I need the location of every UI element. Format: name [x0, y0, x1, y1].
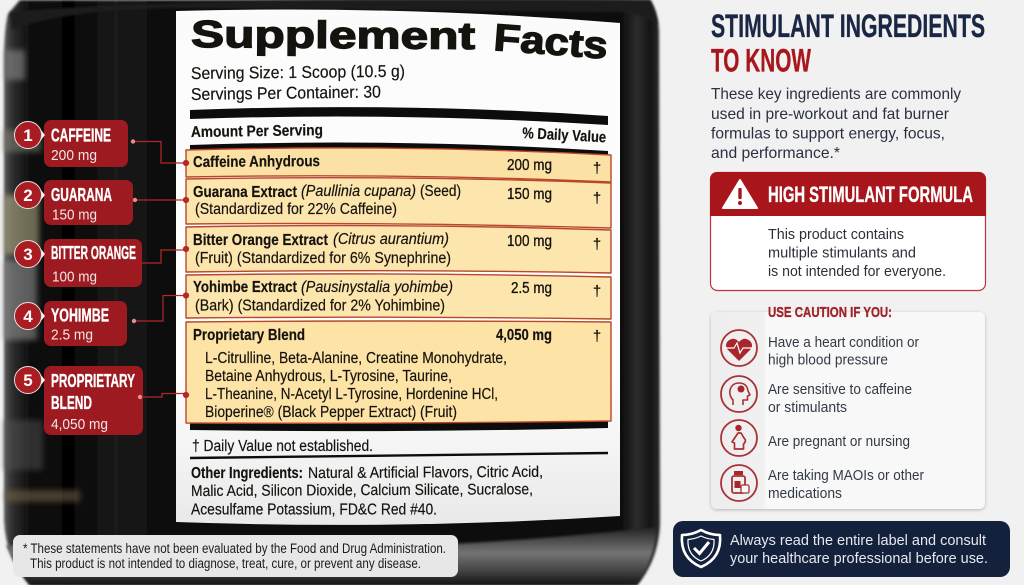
row: guarana extract: Guarana Extract	[193, 184, 297, 201]
caution: medications: Are taking MAOIs or other	[768, 467, 924, 484]
row: proprietary blend: Proprietary Blend	[193, 327, 305, 344]
callout 4: yohimbe: 2.5 mg	[51, 326, 93, 344]
callout 1: caffeine: 200 mg	[51, 147, 97, 164]
intro paragraph: formulas to support energy, focus,	[711, 126, 945, 142]
title: supplement facts	[191, 14, 609, 68]
table header: Amount Per Serving	[191, 122, 323, 141]
callout 3: bitter orange: BITTER ORANGE	[51, 243, 136, 263]
caution: medications: medications	[768, 485, 842, 502]
heading: stimulant ingredients to know	[711, 8, 985, 78]
row: yohimbe extract: 2.5 mg	[511, 280, 552, 297]
other ingredients: Acesulfame Potassium, FD&C Red #40.	[191, 502, 437, 518]
caution: caffeine sensitivity	[721, 376, 912, 416]
row: yohimbe extract: †	[593, 283, 601, 300]
row: proprietary blend: 4,050 mg	[496, 327, 552, 344]
callout 3: bitter orange	[14, 239, 142, 287]
row: caffeine anhydrous: Caffeine Anhydrous	[193, 153, 320, 171]
panel: use caution if you: USE CAUTION IF YOU:	[768, 304, 892, 321]
row: yohimbe extract: Yohimbe Extract	[193, 279, 297, 296]
warning body text: multiple stimulants and	[768, 244, 916, 262]
intro paragraph: used in pre-workout and fat burner	[711, 106, 950, 123]
row: bitter orange extract: (Fruit) (Standardized for 6% Synephrine)	[195, 250, 451, 267]
callout 2: guarana: GUARANA	[51, 185, 112, 205]
row: bitter orange extract: Bitter Orange Extract	[193, 232, 328, 249]
callout 5: proprietary blend: 4,050 mg	[51, 416, 108, 433]
supplement jar	[3, 0, 660, 585]
serving information: Servings Per Container: 30	[191, 82, 381, 104]
callout 2: guarana	[14, 180, 137, 225]
callout 1: caffeine	[14, 120, 135, 167]
callout 3: bitter orange: 3	[23, 245, 33, 264]
callout 4: yohimbe	[14, 301, 136, 346]
row: guarana extract: 150 mg	[507, 186, 552, 203]
row: bitter orange extract: †	[593, 236, 601, 253]
banner: consult your healthcare professional: your healthcare professional before use.	[730, 550, 988, 567]
row: yohimbe extract	[186, 274, 611, 319]
other ingredients	[191, 464, 543, 518]
caution: heart condition: Have a heart condition or	[768, 334, 919, 351]
banner: consult your healthcare professional: Always read the entire label and consult	[730, 532, 987, 549]
panel: high stimulant formula warning	[710, 172, 986, 290]
row: caffeine anhydrous: 200 mg	[507, 157, 552, 174]
row: guarana extract: (Paullinia cupana)	[301, 183, 416, 200]
row: yohimbe extract: (Pausinystalia yohimbe)	[301, 279, 453, 296]
heading: stimulant ingredients to know: TO KNOW	[711, 42, 812, 78]
row: caffeine anhydrous: †	[593, 160, 601, 177]
row: yohimbe extract: (Bark) (Standardized for 2% Yohimbine)	[195, 298, 445, 314]
disclaimer: * These statements have not been evaluated by the Food and Drug Administration.	[23, 541, 446, 556]
warning body text: This product contains	[768, 226, 904, 243]
callout 2: guarana: 150 mg	[52, 206, 97, 224]
caution: pregnant or nursing	[721, 420, 910, 456]
caution: medications	[721, 465, 924, 502]
panel: supplement facts label	[176, 10, 620, 525]
callout 5: proprietary blend: PROPRIETARY	[51, 371, 135, 391]
banner: consult your healthcare professional	[673, 521, 1010, 577]
table header	[191, 122, 607, 146]
other ingredients: Other Ingredients:	[191, 465, 303, 482]
caution: heart condition: high blood pressure	[768, 352, 888, 368]
callout 5: proprietary blend: BLEND	[51, 393, 92, 413]
caution: pregnant or nursing: Are pregnant or nursing	[768, 433, 910, 450]
callout 4: yohimbe: YOHIMBE	[51, 306, 109, 326]
title: supplement facts: Supplement	[191, 14, 476, 58]
serving information: Serving Size: 1 Scoop (10.5 g)	[191, 62, 405, 83]
row: proprietary blend: L-Theanine, N-Acetyl L-Tyrosine, Hordenine HCl,	[205, 386, 498, 403]
row: bitter orange extract	[186, 226, 611, 273]
row: proprietary blend: Betaine Anhydrous, L-Tyrosine, Taurine,	[205, 368, 452, 385]
row: proprietary blend	[186, 321, 611, 423]
callout 4: yohimbe: 4	[23, 307, 33, 326]
serving information	[191, 62, 405, 104]
row: guarana extract: (Seed)	[420, 183, 461, 200]
other ingredients: Natural & Artificial Flavors, Citric Acid,	[308, 464, 543, 482]
disclaimer	[13, 535, 458, 577]
callout 3: bitter orange: 100 mg	[52, 268, 97, 286]
caution: heart condition	[721, 330, 919, 368]
row: caffeine anhydrous	[186, 148, 611, 182]
warning body text: is not intended for everyone.	[768, 263, 946, 280]
row: bitter orange extract: 100 mg	[507, 233, 552, 250]
row: proprietary blend: Bioperine® (Black Pepper Extract) (Fruit)	[205, 404, 457, 421]
intro paragraph: and performance.*	[711, 145, 840, 162]
row: guarana extract	[186, 178, 611, 228]
other ingredients: Malic Acid, Silicon Dioxide, Calcium Silicate, Sucralose,	[191, 481, 533, 500]
icon: shield with check	[682, 530, 720, 567]
row: proprietary blend: L-Citrulline, Beta-Alanine, Creatine Monohydrate,	[205, 350, 507, 367]
caution: caffeine sensitivity: or stimulants	[768, 399, 847, 416]
row: guarana extract: †	[593, 190, 601, 207]
row: bitter orange extract: (Citrus aurantium)	[333, 231, 449, 248]
callout 5: proprietary blend	[14, 366, 143, 435]
callout 1: caffeine: 1	[23, 126, 33, 145]
row: proprietary blend: †	[593, 328, 601, 345]
callout 5: proprietary blend: 5	[23, 371, 33, 390]
callout 2: guarana: 2	[23, 186, 33, 205]
disclaimer: This product is not intended to diagnose, treat, cure, or prevent any disease.	[30, 556, 421, 571]
footnote: daily value: † Daily Value not established.	[192, 438, 373, 455]
intro paragraph	[711, 86, 961, 162]
panel: use caution if you	[711, 304, 985, 509]
warning body text	[768, 226, 946, 280]
caution: caffeine sensitivity: Are sensitive to caffeine	[768, 381, 912, 398]
callout 1: caffeine: CAFFEINE	[51, 126, 111, 146]
title: supplement facts: Facts	[492, 17, 609, 68]
intro paragraph: These key ingredients are commonly	[711, 86, 961, 103]
icon: warning triangle	[723, 180, 757, 208]
table header: % Daily Value	[522, 125, 607, 146]
row: guarana extract: (Standardized for 22% Caffeine)	[195, 201, 397, 218]
callout connectors	[133, 142, 188, 398]
